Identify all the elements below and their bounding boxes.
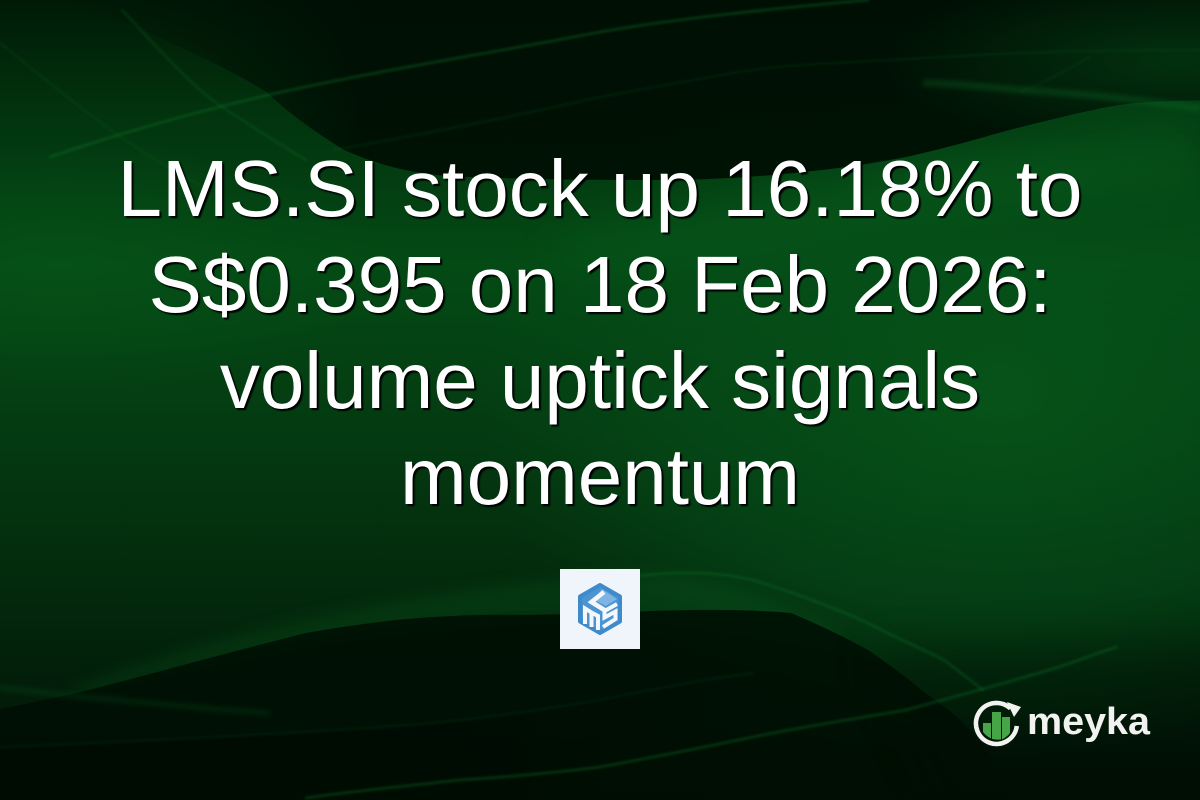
title: S$0.395 on 18 Feb 2026: [149, 240, 1051, 329]
letter L [592, 592, 606, 611]
title [118, 144, 1082, 521]
hexagon cube [580, 585, 620, 633]
soft bands [560, 115, 1200, 262]
brand logo: meyka [974, 700, 1151, 746]
letter S [603, 604, 617, 627]
title: volume uptick signals [220, 336, 980, 425]
letter M [585, 608, 598, 630]
icon: LMS company logo [560, 569, 640, 649]
wordmark: meyka [1027, 701, 1151, 743]
icon: meyka circular arrow with bars [976, 702, 1021, 744]
dark shape: bottom blob [0, 610, 1030, 800]
title: LMS.SI stock up 16.18% to [118, 144, 1082, 233]
dark shape: top [0, 0, 1200, 180]
title: momentum [400, 432, 800, 521]
dark shape: lower right fade [868, 640, 1200, 800]
